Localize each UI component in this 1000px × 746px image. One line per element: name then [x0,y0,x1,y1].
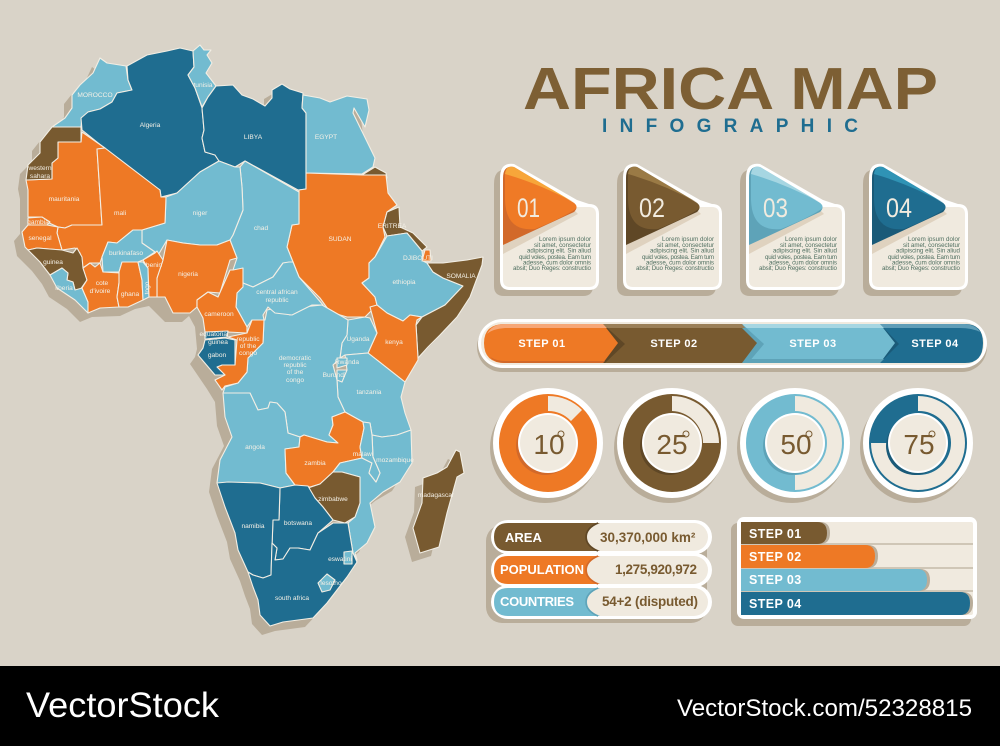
country labels: angola [245,444,265,451]
country labels: ethiopia [392,279,416,286]
Halaib triangle [362,167,387,178]
Libya [202,84,306,190]
country labels: western [27,165,52,172]
bar step 02 [741,545,878,568]
country labels: SOMALIA [446,273,476,280]
subtitle: INFOGRAPHIC [602,116,858,137]
number: 02 [639,193,665,223]
card 03 [740,164,845,296]
donut 10 percent [490,388,603,503]
Nigeria [157,240,237,313]
Sudan [287,173,397,317]
facts panel [486,520,712,623]
Democratic Republic of the Congo [223,305,348,443]
Djibouti [422,250,431,261]
text block [513,236,592,272]
country labels: south africa [275,595,309,602]
country labels: EGYPT [315,134,337,141]
Malawi [360,422,380,482]
Madagascar [413,450,464,553]
text block: adipiscing elit. Sin aliud [650,248,715,254]
donut 50 percent [737,388,850,503]
text block: adesse, cum dolor omnis [646,260,714,266]
triangle [626,167,700,245]
text block: adesse, cum dolor omnis [892,260,960,266]
Tunisia [188,45,216,107]
country labels: d'ivoire [90,288,111,295]
area row: 30,370,000 km² [600,530,696,545]
bar step 04: STEP 04 [749,597,802,611]
card 02 [617,164,722,296]
country labels: DJIBOUTI [403,255,433,262]
country labels: mauritania [49,196,80,203]
country labels: tunisia [193,82,213,89]
text block [882,236,961,272]
text block: quid voles, postea. Eam tum [642,254,714,261]
countries row: COUNTRIES [500,594,574,609]
population row: POPULATION [500,562,584,577]
Niger [142,161,243,257]
donut 75 percent [860,388,973,503]
area row: AREA [505,530,542,545]
country labels: republic [283,362,307,369]
country labels: ERITREA [378,223,407,230]
text block: Lorem ipsum dolor [785,236,837,243]
donut 25 percent [614,388,727,503]
number: 01 [517,193,540,223]
country labels: botswana [284,520,312,527]
Mozambique [333,430,412,560]
Western Sahara [26,127,81,180]
footer brand: VectorStock [26,686,220,725]
country labels: SUDAN [328,236,352,243]
country labels: benin [146,262,162,269]
Mauritania [26,132,105,228]
country labels: gambia [27,219,49,226]
Rwanda [337,358,347,368]
text block: sit amet, consectetur [903,242,960,249]
step 02 segment [595,324,757,363]
Ethiopia [362,233,463,321]
country labels: LIBYA [244,134,263,141]
Botswana [272,485,333,560]
country labels: of the [287,369,304,376]
Mali [57,148,166,268]
country labels: of the [240,343,257,350]
bar step 04 [741,592,973,615]
footer bar [0,666,1000,746]
country labels: MOROCCO [77,92,113,99]
Morocco [52,58,132,127]
text block: adipiscing elit. Sin aliud [773,248,838,254]
population row [491,553,712,587]
country labels: zimbabwe [318,496,348,503]
country labels: democratic [279,355,312,362]
step 03 segment [735,324,895,363]
countries row [491,585,712,619]
country labels: namibia [241,523,265,530]
donut 75 percent: 75 [903,429,935,460]
country labels: togo [144,281,151,294]
bar step 01 [741,522,830,544]
bar step 03: STEP 03 [749,573,802,587]
Burundi [337,370,347,382]
donut 50 percent: 50 [780,429,812,460]
donut 10 percent: 10 [533,429,565,460]
step labels: STEP 01 [518,338,566,350]
Uganda [340,317,377,358]
triangle [749,167,822,245]
Ghana [117,262,143,307]
area row [491,520,712,554]
map drop shadow [14,54,475,635]
Eritrea [383,207,427,251]
text block: sit amet, consectetur [534,242,591,249]
Liberia [50,268,88,313]
country labels: zambia [304,460,326,467]
bar step 01: STEP 01 [749,527,802,541]
Chad [230,161,299,287]
country labels: eswatini [328,556,352,563]
country shapes [22,45,483,626]
country labels: Rwanda [335,359,359,366]
Zimbabwe [308,472,360,523]
country labels: Uganda [346,336,370,343]
text block: sit amet, consectetur [780,242,837,249]
text block: sit amet, consectetur [657,242,714,249]
country labels: madagascar [418,492,455,499]
Kenya [368,305,422,382]
triangle [872,167,946,245]
country labels: equatorial [200,331,229,338]
text block: absit; Duo Reges: constructio [636,265,715,272]
footer url: VectorStock.com/52328815 [677,695,972,722]
donut 25 percent: 25 [656,429,688,460]
Gabon [198,338,235,375]
Algeria [81,48,219,197]
horizontal bar chart [731,517,977,626]
country labels: gabon [208,352,226,359]
text block: quid voles, postea. Eam tum [888,254,960,261]
South Africa [248,523,357,626]
country labels: republic [265,297,289,304]
country labels: congo [286,377,304,384]
Equatorial Guinea [205,331,228,339]
text block [759,236,838,272]
card 01 [494,164,599,296]
Zambia [285,412,364,487]
step 04 segment [870,324,983,363]
Cameroon [197,268,247,333]
country labels: mali [114,210,127,217]
Somalia [416,257,483,358]
country labels: liberia [55,285,73,292]
text block: Lorem ipsum dolor [662,236,714,243]
text block: quid voles, postea. Eam tum [519,254,591,261]
triangle [503,167,576,245]
Tanzania [337,353,411,437]
text block: Lorem ipsum dolor [539,236,591,243]
text block [636,236,715,272]
text block: Lorem ipsum dolor [908,236,960,243]
country labels: malawi [353,451,374,458]
step labels [518,338,959,350]
text block: adesse, cum dolor omnis [769,260,837,266]
country labels: congo [239,350,257,357]
Eswatini [344,551,352,564]
Angola [217,393,300,488]
Burkina Faso [102,230,155,272]
text block: absit; Duo Reges: constructio [513,265,592,272]
country labels: guinea [43,259,63,266]
country labels: sahara [30,173,50,180]
bar step 02: STEP 02 [749,550,802,564]
country labels: niger [193,210,208,217]
country labels: mozambique [376,457,414,464]
country labels: republic [236,336,260,343]
text block: quid voles, postea. Eam tum [765,254,837,261]
Namibia [217,482,280,578]
step labels: STEP 03 [789,338,837,350]
map of Africa [14,45,483,635]
text block: absit; Duo Reges: constructio [882,265,961,272]
step labels: STEP 02 [650,338,698,350]
text block: adipiscing elit. Sin aliud [527,248,592,254]
Senegal [22,225,62,250]
country labels: cote [96,280,109,287]
country labels: Burundi [323,372,346,379]
number: 04 [886,193,912,223]
Cote d'Ivoire [82,263,120,313]
text block: adipiscing elit. Sin aliud [896,248,961,254]
country labels: kenya [385,339,403,346]
bar step 03 [741,569,930,591]
step labels: STEP 04 [911,338,959,350]
Lesotho [318,574,335,592]
number: 03 [763,193,788,223]
country labels: chad [254,225,268,232]
Benin [143,251,163,297]
Republic of the Congo [215,320,264,390]
Gambia [28,217,50,225]
Togo [138,262,149,300]
countries row: 54+2 (disputed) [602,594,698,609]
country labels: senegal [28,235,52,242]
text block: absit; Duo Reges: constructio [759,265,838,272]
step 01 segment [484,324,618,363]
country labels: burkinafaso [109,250,143,257]
Central African Republic [236,262,323,327]
country labels: lesotho [320,580,342,587]
country labels: tanzania [357,389,382,396]
population row: 1,275,920,972 [615,562,697,577]
country labels: cameroon [204,311,234,318]
country labels: central african [256,289,298,296]
country labels: Algeria [140,122,161,129]
text block: adesse, cum dolor omnis [523,260,591,266]
Egypt [302,95,375,174]
card 04 [863,164,968,296]
country labels [27,82,476,602]
country labels: ghana [121,291,139,298]
step progress bar [477,319,987,372]
country labels: guinea [208,339,228,346]
Guinea [28,248,87,290]
title: AFRICA MAP [523,56,938,122]
country labels: nigeria [178,271,198,278]
